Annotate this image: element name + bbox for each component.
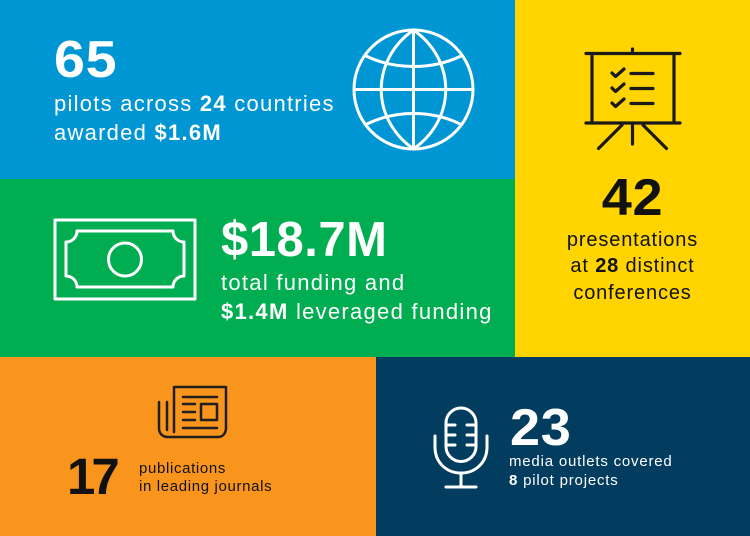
number: 23: 23 bbox=[510, 399, 571, 457]
icon: microphone bbox=[435, 408, 487, 487]
text: media outlets: media outlets covered bbox=[509, 453, 673, 470]
number: $18.7M: $18.7M bbox=[221, 213, 387, 267]
panel: presentations bbox=[515, 0, 750, 357]
text: media outlets: 8 pilot projects bbox=[509, 472, 619, 489]
panel: media bbox=[376, 357, 750, 536]
panel: funding bbox=[0, 179, 515, 357]
icon: globe bbox=[354, 30, 473, 149]
text: pilots across countries: awarded $1.6M bbox=[54, 120, 222, 145]
text: publications bbox=[139, 460, 272, 495]
text: pilots across countries: pilots across 24 countries bbox=[54, 91, 335, 116]
text: presentations: presentations bbox=[567, 228, 698, 250]
text: media outlets bbox=[509, 453, 673, 489]
icon: newspaper bbox=[159, 387, 226, 437]
text: total funding: $1.4M leveraged funding bbox=[221, 299, 493, 324]
text: presentations: conferences bbox=[573, 282, 692, 304]
text: total funding: total funding and bbox=[221, 270, 405, 295]
icon: presentation board bbox=[586, 49, 680, 148]
text: total funding bbox=[221, 270, 493, 324]
number: 65: 65 bbox=[54, 31, 117, 89]
text: presentations: at 28 distinct bbox=[570, 255, 695, 277]
text: publications: publications bbox=[139, 460, 226, 476]
panel: pilots bbox=[0, 0, 515, 179]
number: 42: 42 bbox=[602, 169, 663, 227]
number: 17: 17 bbox=[67, 448, 116, 505]
panel: publications bbox=[0, 357, 376, 536]
text: pilots across countries bbox=[54, 91, 335, 145]
text: publications: in leading journals bbox=[139, 478, 272, 495]
icon: banknote bbox=[55, 220, 195, 299]
text: presentations bbox=[567, 228, 698, 304]
